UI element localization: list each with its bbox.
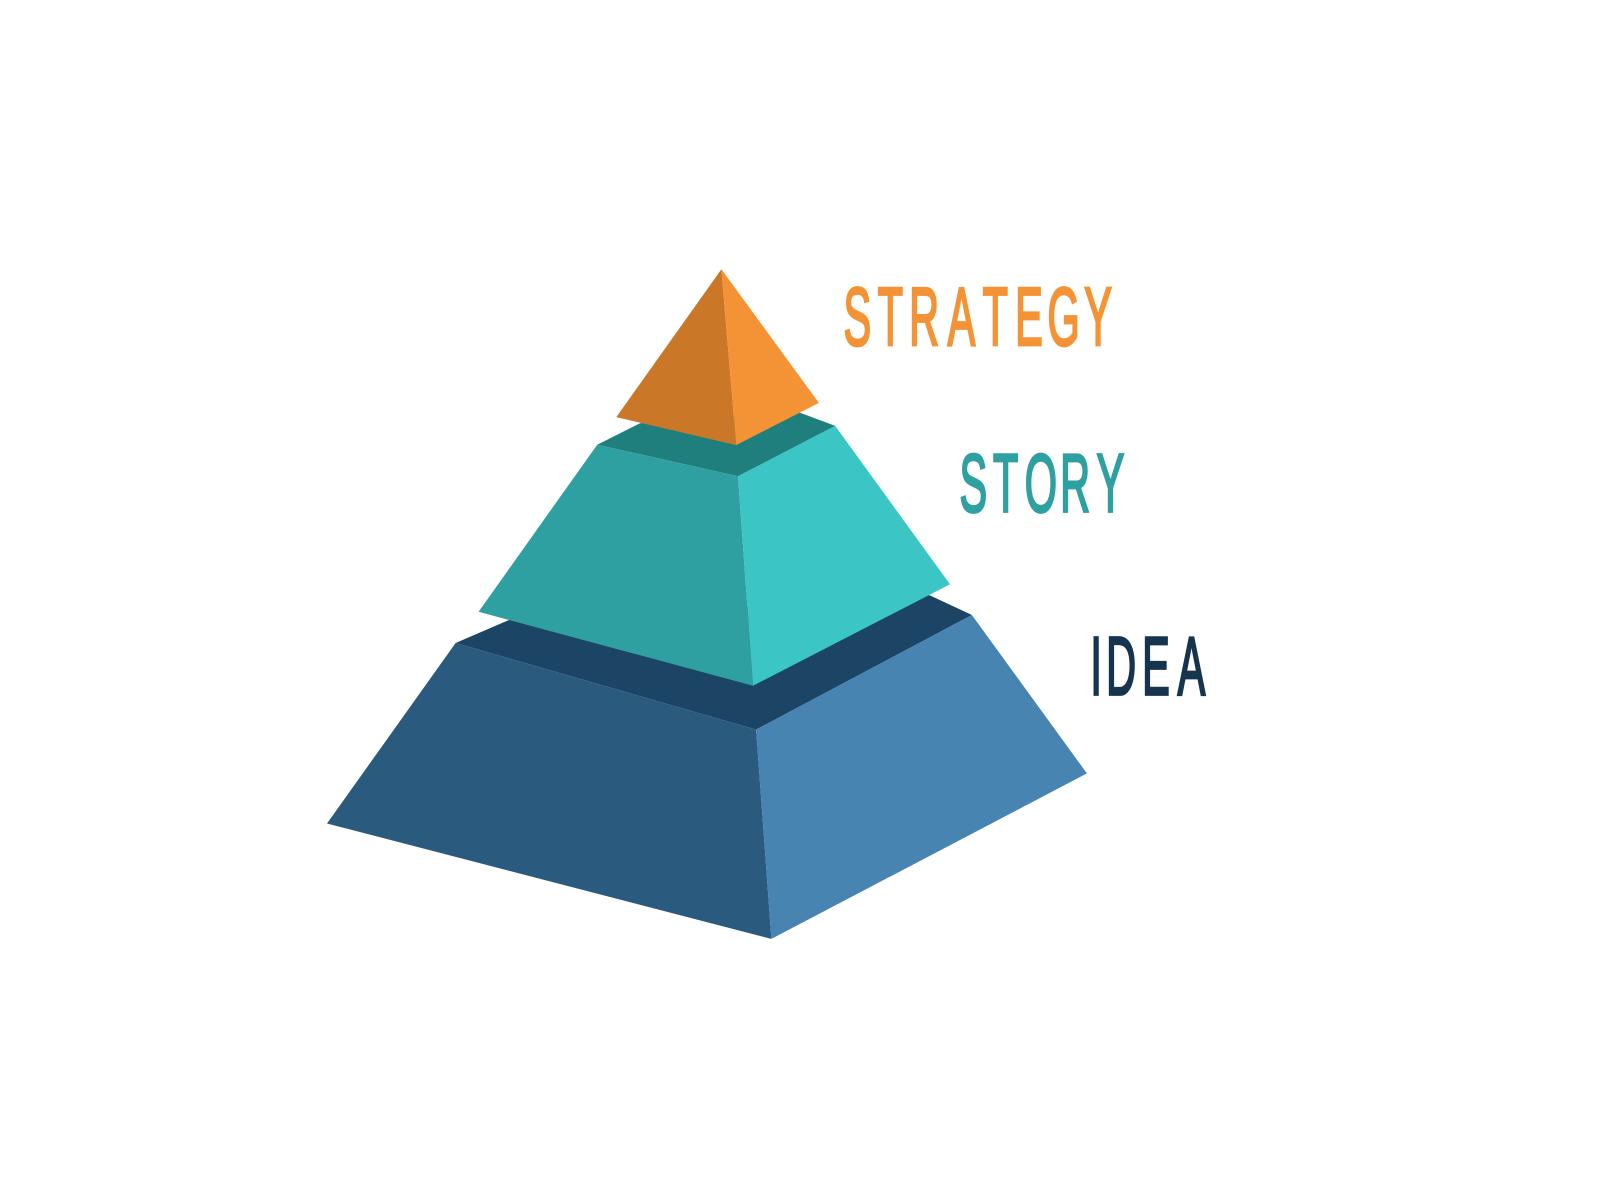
story left face (479, 445, 753, 686)
idea left face (327, 643, 771, 939)
label: story: STORY (960, 437, 1124, 529)
pyramid tier: story (middle) (479, 412, 950, 686)
idea top surface (456, 595, 972, 730)
pyramid tier: idea (base) (327, 595, 1087, 939)
story right face (738, 426, 950, 686)
idea right face (756, 615, 1087, 939)
pyramid tier: strategy (apex) (616, 269, 819, 445)
strategy right face (721, 269, 819, 445)
story top surface (597, 412, 835, 476)
label: idea: IDEA (1090, 620, 1205, 712)
label: strategy: STRATEGY (844, 270, 1112, 363)
strategy left face (616, 269, 736, 445)
